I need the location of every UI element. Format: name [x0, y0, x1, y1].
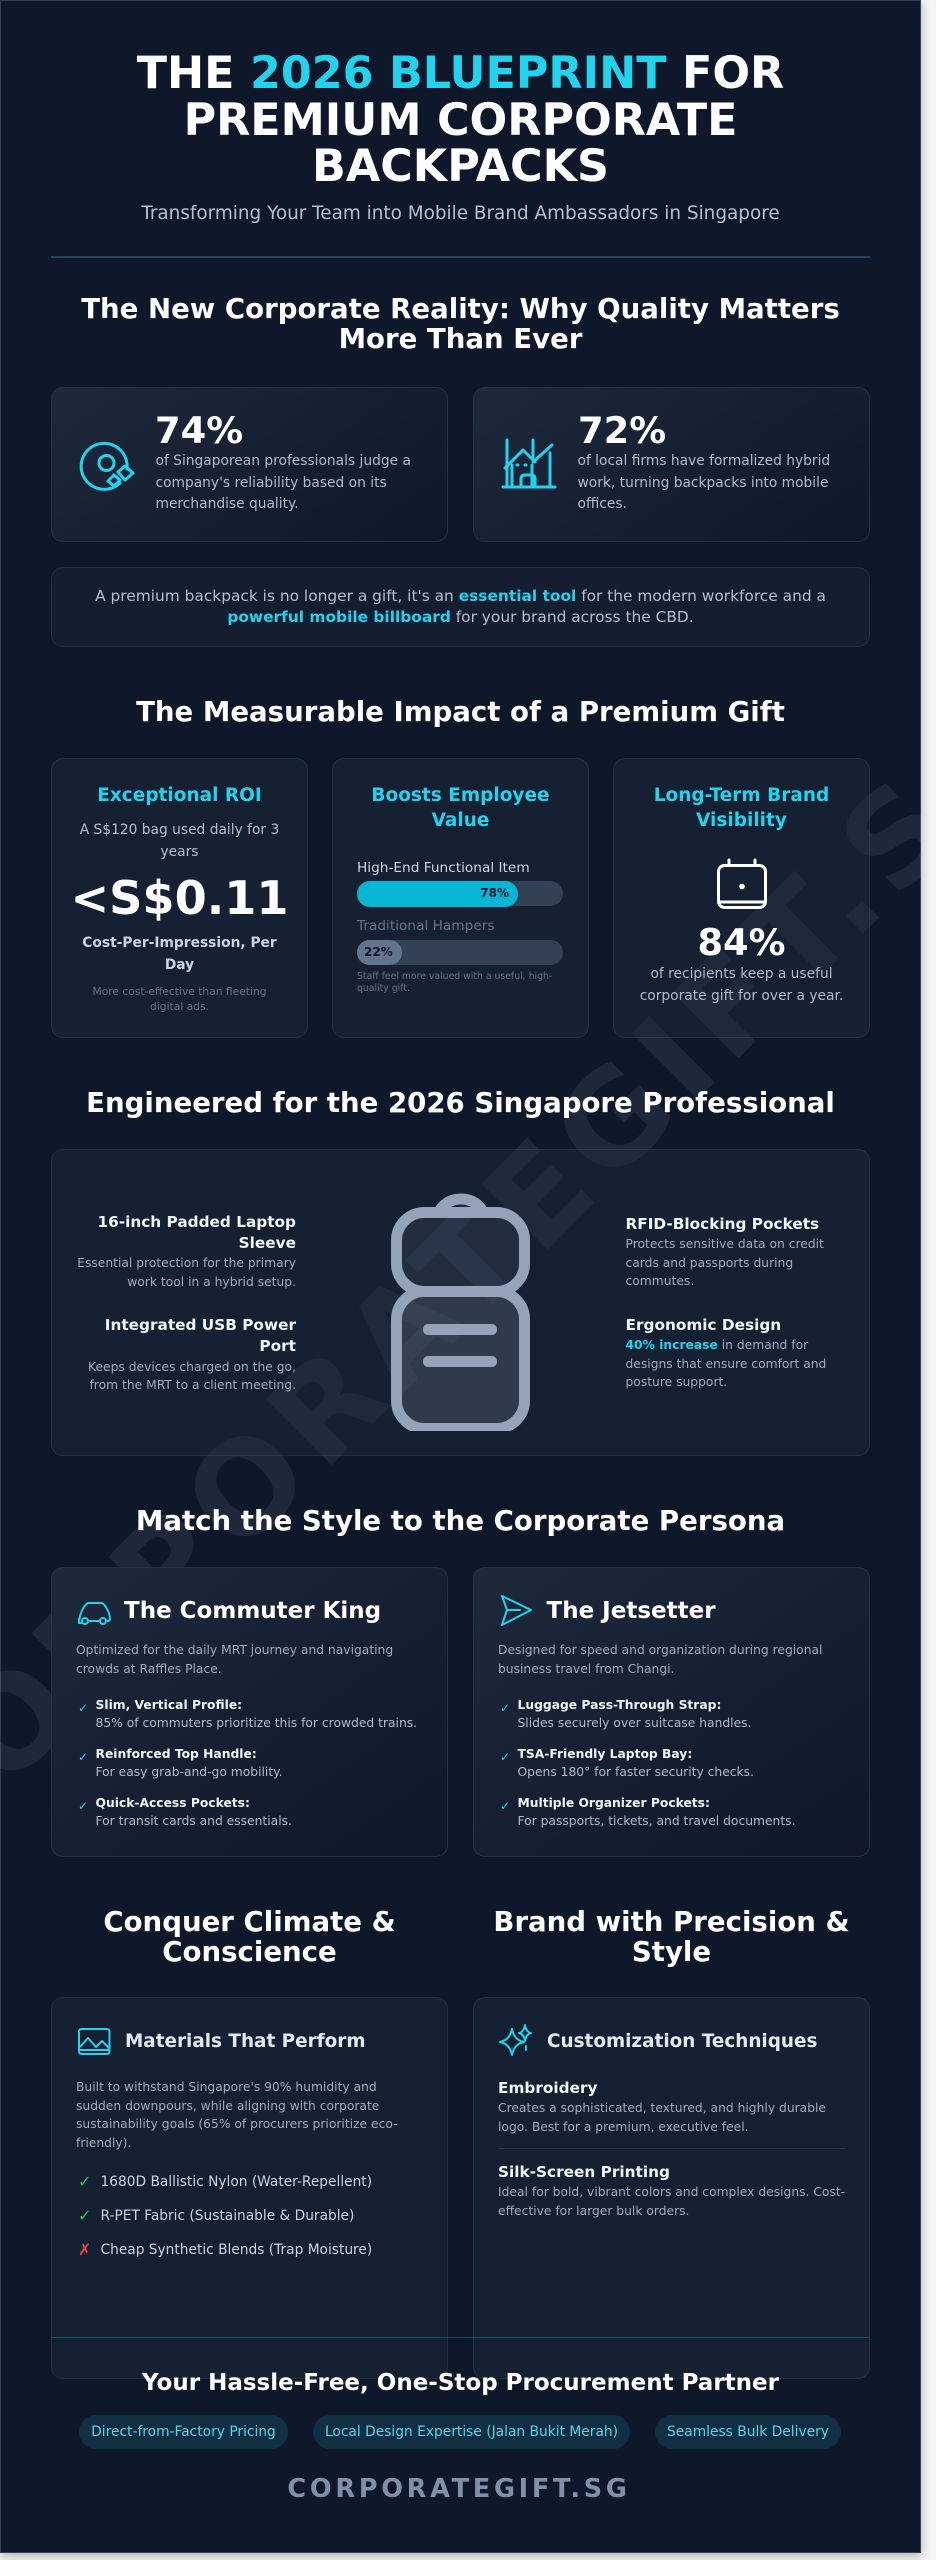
stat description: corporate gift for over a year. — [640, 988, 843, 1004]
stat description: of Singaporean professionals judge a — [156, 453, 411, 469]
technique: silk-screen: Silk-Screen Printing — [498, 2163, 670, 2181]
feature: laptop sleeve: Essential protection for the primary — [77, 1256, 296, 1270]
stat value: 74% — [155, 409, 243, 452]
technique: embroidery: logo. Best for a premium, executive feel. — [498, 2120, 749, 2134]
heading: new corporate reality: More Than Ever — [339, 322, 582, 355]
panel: 74% stat — [51, 387, 448, 542]
material: r-pet: R-PET Fabric (Sustainable & Durable) — [100, 2208, 354, 2224]
heading: brand: Brand with Precision & — [493, 1904, 850, 1938]
feature: usb port: Integrated USB Power — [105, 1316, 296, 1334]
panel: brand visibility — [613, 758, 870, 1038]
title: BACKPACKS — [312, 141, 609, 192]
stat description — [578, 453, 830, 512]
bar label: hampers: Traditional Hampers — [357, 918, 494, 934]
materials paragraph: Built to withstand Singapore's 90% humidity and — [76, 2080, 377, 2094]
panel: customization — [473, 1997, 870, 2379]
heading: brand: Style — [632, 1935, 711, 1968]
stat description: of recipients keep a useful — [650, 966, 833, 982]
footer — [51, 2337, 870, 2553]
feature: laptop sleeve: 16-inch Padded Laptop — [97, 1212, 296, 1230]
stat description — [156, 453, 411, 512]
icon: vehicle — [78, 1602, 111, 1625]
brand name: CORPORATEGIFT.SG — [287, 2474, 631, 2504]
stat description: merchandise quality. — [156, 496, 299, 512]
feature: rfid — [626, 1215, 824, 1288]
check item: laptop bay: ✓ — [500, 1750, 510, 1764]
heading: climate — [103, 1904, 396, 1968]
card heading: Exceptional ROI — [97, 785, 262, 806]
check item: pockets: For transit cards and essentials. — [96, 1814, 292, 1828]
persona description — [76, 1643, 393, 1676]
title: THE 2026 BLUEPRINT FOR — [137, 48, 784, 99]
bar: 22% — [357, 940, 563, 965]
feature: ergonomic: Ergonomic Design — [626, 1316, 781, 1334]
stat value: 72% — [578, 409, 666, 452]
feature: ergonomic: 40% increase in demand for — [626, 1338, 808, 1352]
bar: 78%: 78% — [480, 886, 509, 900]
title — [136, 48, 784, 192]
bar: 22%: 22% — [364, 945, 393, 959]
persona description: Optimized for the daily MRT journey and navigating — [76, 1643, 393, 1657]
heading: brand — [493, 1904, 850, 1968]
bar: 78% — [357, 881, 563, 906]
pill: delivery: Seamless Bulk Delivery — [667, 2424, 829, 2440]
material: nylon: ✓ — [78, 2172, 91, 2191]
subtitle: Transforming Your Team into Mobile Brand Ambassadors in Singapore — [141, 203, 780, 224]
icon: hybrid house chart — [502, 438, 556, 488]
feature: usb port: from the MRT to a client meeting. — [89, 1378, 296, 1392]
icon: brand disc — [80, 442, 135, 491]
callout text: A premium backpack is no longer a gift, it's an essential tool for the modern workforce and a — [95, 587, 826, 605]
feature: usb port — [88, 1316, 296, 1392]
check item: strap: Slides securely over suitcase handles. — [518, 1716, 751, 1730]
panel: jetsetter — [473, 1567, 870, 1857]
cost per impression label — [82, 935, 277, 973]
card heading: Visibility — [696, 810, 787, 831]
check item: profile: ✓ — [78, 1701, 88, 1715]
feature: rfid: RFID-Blocking Pockets — [626, 1215, 819, 1233]
stat description — [640, 966, 843, 1004]
icon: paper plane — [501, 1595, 532, 1626]
check item: handle — [78, 1747, 283, 1779]
icon: picture — [78, 2028, 110, 2055]
pill: delivery — [655, 2415, 841, 2449]
feature: usb port: Port — [259, 1337, 296, 1355]
feature: rfid: cards and passports during — [626, 1256, 793, 1270]
technique: silk-screen: Ideal for bold, vibrant colors and complex designs. Cost- — [498, 2185, 845, 2199]
card heading: Value — [432, 810, 489, 831]
footnote: digital ads. — [150, 1000, 209, 1013]
materials paragraph: friendly). — [76, 2136, 131, 2150]
footnote: More cost-effective than fleeting — [92, 985, 267, 998]
backpack illustration — [391, 1194, 530, 1431]
heading: climate: Conquer Climate & — [103, 1904, 396, 1938]
check item: strap — [500, 1698, 751, 1730]
check item: organizer: For passports, tickets, and travel documents. — [518, 1814, 795, 1828]
persona description: business travel from Changi. — [498, 1662, 674, 1676]
callout text — [95, 587, 826, 626]
card title: Customization Techniques — [547, 2031, 817, 2052]
check item: strap: ✓ — [500, 1701, 510, 1715]
card heading: Long-Term Brand — [654, 785, 829, 806]
heading: persona: Match the Style to the Corporate Persona — [136, 1504, 785, 1536]
feature: ergonomic — [626, 1316, 826, 1389]
check item: handle: For easy grab-and-go mobility. — [96, 1765, 283, 1779]
panel: commuter king — [51, 1567, 448, 1857]
feature: laptop sleeve: work tool in a hybrid setup. — [127, 1275, 296, 1289]
material: r-pet: ✓ — [78, 2206, 91, 2225]
check item: profile: Slim, Vertical Profile: — [96, 1698, 242, 1712]
pill: pricing — [79, 2415, 288, 2449]
panel: exceptional ROI — [51, 758, 308, 1038]
stat value: 84% — [697, 921, 786, 964]
stat description: company's reliability based on its — [156, 475, 387, 491]
bar label: high-end: High-End Functional Item — [357, 860, 530, 876]
card title: Materials That Perform — [125, 2031, 366, 2052]
check item: handle: ✓ — [78, 1750, 88, 1764]
title: PREMIUM CORPORATE — [184, 94, 737, 146]
bar note — [357, 971, 552, 994]
card heading — [371, 785, 550, 831]
persona description — [498, 1643, 822, 1676]
check item: pockets: Quick-Access Pockets: — [96, 1796, 250, 1810]
check item: profile: 85% of commuters prioritize this for crowded trains. — [96, 1716, 417, 1730]
materials paragraph — [76, 2080, 398, 2150]
persona description: crowds at Raffles Place. — [76, 1662, 222, 1676]
technique: embroidery: Embroidery — [498, 2079, 597, 2097]
cost per impression label: Cost-Per-Impression, Per — [82, 935, 277, 951]
pill: local design: Local Design Expertise (Jalan Bukit Merah) — [325, 2424, 618, 2440]
icon: calendar — [717, 858, 767, 909]
card heading: Boosts Employee — [371, 785, 550, 806]
bar note: Staff feel more valued with a useful, high- — [357, 971, 552, 982]
bag usage text — [80, 822, 279, 860]
feature: rfid: Protects sensitive data on credit — [626, 1237, 824, 1251]
materials paragraph: sustainability goals (65% of procurers prioritize eco- — [76, 2117, 398, 2131]
feature: usb port: Keeps devices charged on the go, — [88, 1360, 296, 1374]
stat description: offices. — [578, 496, 627, 512]
pill: local design — [313, 2415, 630, 2449]
footnote — [92, 985, 267, 1013]
check item: laptop bay: TSA-Friendly Laptop Bay: — [518, 1747, 692, 1761]
feature: ergonomic: posture support. — [626, 1375, 727, 1389]
technique: silk-screen: effective for larger bulk orders. — [498, 2204, 689, 2218]
panel: materials — [51, 1997, 448, 2379]
material: nylon: 1680D Ballistic Nylon (Water-Repellent) — [100, 2174, 372, 2190]
panel: employee value — [332, 758, 589, 1038]
cost per impression label: Day — [165, 957, 194, 973]
persona title: The Commuter King — [124, 1598, 381, 1624]
heading: engineered: Engineered for the 2026 Singapore Professional — [86, 1086, 835, 1119]
callout text: powerful mobile billboard for your brand across the CBD. — [227, 608, 694, 626]
check item: profile — [78, 1698, 417, 1730]
pill: pricing: Direct-from-Factory Pricing — [91, 2424, 276, 2440]
technique: embroidery — [498, 2079, 826, 2134]
check item: laptop bay: Opens 180° for faster security checks. — [518, 1765, 754, 1779]
feature: rfid: commutes. — [626, 1274, 694, 1288]
technique: silk-screen — [498, 2163, 845, 2218]
check item: laptop bay — [500, 1747, 754, 1779]
bar note: quality gift. — [357, 983, 410, 994]
heading: new corporate reality: The New Corporate Reality: Why Quality Matters — [81, 292, 840, 324]
feature: laptop sleeve: Sleeve — [239, 1234, 296, 1252]
footer heading: Your Hassle-Free, One-Stop Procurement Partner — [142, 2370, 779, 2396]
check item: organizer: Multiple Organizer Pockets: — [518, 1796, 710, 1810]
persona description: Designed for speed and organization during regional — [498, 1643, 822, 1657]
heading: new corporate reality — [81, 292, 840, 355]
check item: handle: Reinforced Top Handle: — [96, 1747, 257, 1761]
feature: ergonomic: designs that ensure comfort and — [626, 1357, 826, 1371]
technique: embroidery: Creates a sophisticated, textured, and highly durable — [498, 2101, 826, 2115]
heading: climate: Conscience — [162, 1935, 337, 1968]
stat description: of local firms have formalized hybrid — [578, 453, 830, 469]
material: synthetic: Cheap Synthetic Blends (Trap Moisture) — [100, 2242, 372, 2258]
icon: sparkles — [499, 2024, 532, 2056]
callout: essential tool — [51, 567, 870, 647]
check item: pockets: ✓ — [78, 1799, 88, 1813]
stat description: work, turning backpacks into mobile — [578, 475, 828, 491]
materials paragraph: sudden downpours, while aligning with corporate — [76, 2098, 379, 2112]
heading: measurable impact: The Measurable Impact of a Premium Gift — [136, 695, 785, 728]
panel: backpack features — [51, 1149, 870, 1456]
feature: laptop sleeve — [77, 1212, 296, 1289]
check item: organizer — [500, 1796, 795, 1828]
panel: 72% stat — [473, 387, 870, 542]
check item: pockets — [78, 1796, 292, 1828]
check item: organizer: ✓ — [500, 1799, 510, 1813]
persona title: The Jetsetter — [546, 1598, 716, 1624]
bag usage text: A S$120 bag used daily for 3 — [80, 822, 279, 838]
bag usage text: years — [161, 844, 198, 860]
card heading — [654, 785, 829, 831]
material: synthetic: ✗ — [78, 2240, 91, 2259]
big number: <S$0.11 — [70, 871, 289, 925]
check item: strap: Luggage Pass-Through Strap: — [518, 1698, 721, 1712]
